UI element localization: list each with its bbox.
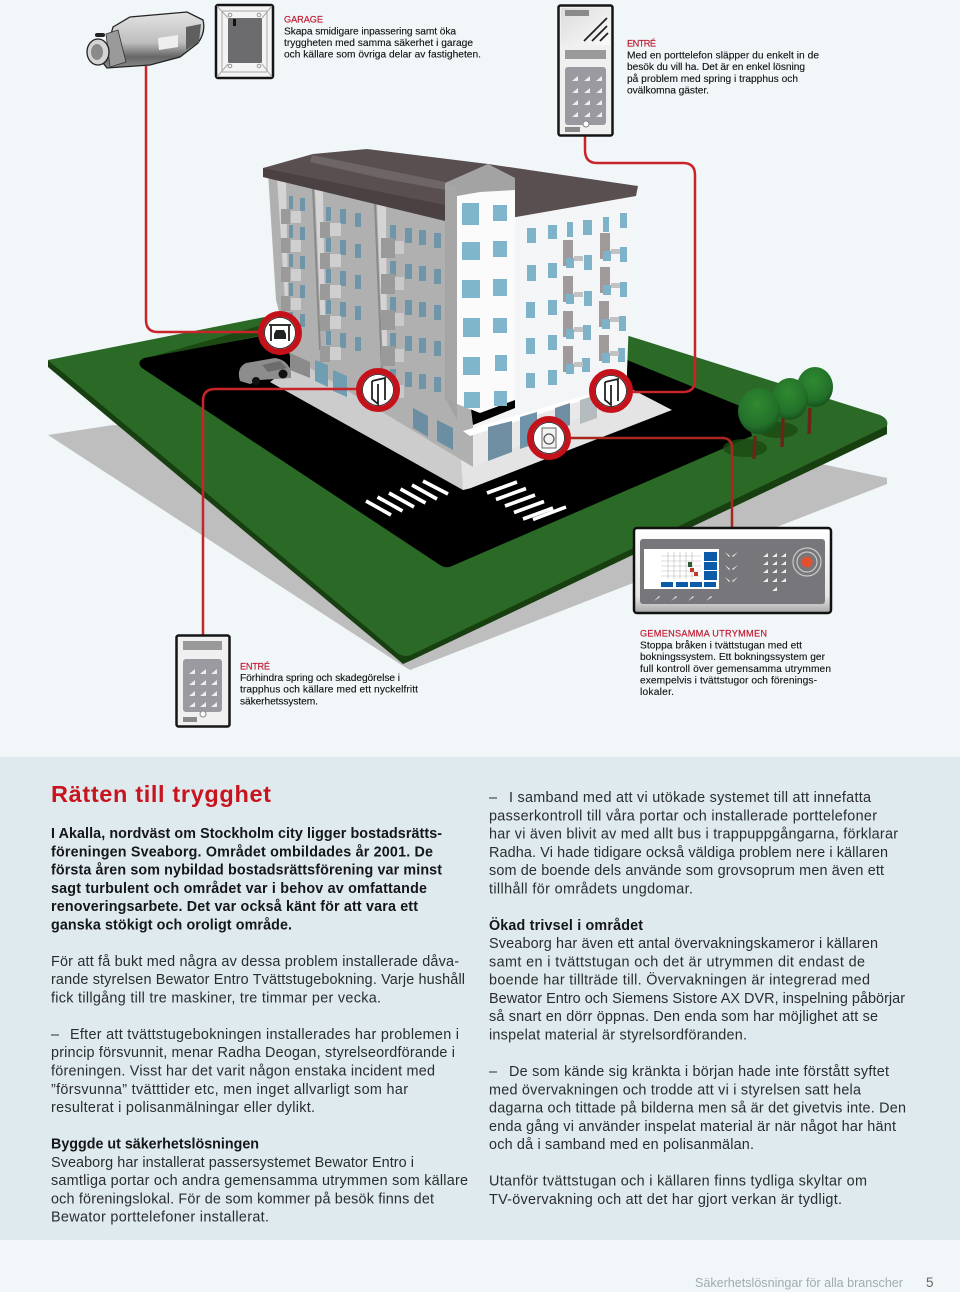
icon: garage reader box — [216, 5, 273, 78]
text block: article right column: inspelat material är styrelsordföranden. — [489, 1028, 747, 1044]
text block: article left column: Sveaborg har installerat passersystemet Bewator Entro i — [51, 1155, 414, 1171]
text block: article right column: Bewator Entro och Siemens Sistore AX DVR, inspelning påbörjar — [489, 991, 905, 1007]
text block: article left column: och föreningslokal. För de som kommer på besök finns det — [51, 1191, 434, 1207]
base windows left — [290, 353, 310, 378]
roof — [263, 149, 638, 220]
text block: entry phone note: ENTRÉ — [627, 39, 656, 49]
text block: entry phone note: ovälkomna gäster. — [627, 86, 709, 96]
text block: keypad note: ENTRÉ — [240, 661, 270, 671]
text block: article left column: första åren som nybildad bostadsrättsförening var minst — [51, 862, 442, 878]
text block: garage note: GARAGE — [284, 15, 323, 25]
icon: entry phone — [558, 6, 612, 136]
text block: article left column: föreningen. Visst har det varit någon enstaka incident med — [51, 1064, 435, 1080]
text block: article right column: TV-övervakning och att det har gjort verkan är tydligt. — [489, 1192, 842, 1208]
trees — [723, 367, 833, 459]
text block: article right column: De som kände sig kränkta i början hade inte förstått syftet — [509, 1064, 889, 1080]
pavement — [270, 360, 672, 490]
footer text: Säkerhetslösningar för alla branscher — [695, 1276, 903, 1290]
illustration: building on green plot with connected devices — [48, 4, 888, 728]
text block: article left column: ganska stökigt och oroligt område. — [51, 917, 292, 933]
text block: article left column: renoveringsarbete. Det var också känt för att vara ett — [51, 899, 418, 915]
text block: shared spaces note: lokaler. — [640, 687, 674, 698]
panel: article background band — [0, 757, 960, 1240]
text block: article right column: passerkontroll till våra portar och installerade porttelefoner — [489, 808, 877, 824]
icon: surveillance camera — [87, 12, 204, 68]
text block: entry phone note: besök du vill ha. Det är en enkel lösning — [627, 62, 805, 73]
text block: article right column: Ökad trivsel i området — [489, 917, 643, 934]
heading: Rätten till trygghet — [51, 781, 271, 807]
text block: keypad note: trapphus och källare med ett nyckelfritt — [240, 685, 418, 696]
text block: article left column: Bewator porttelefoner installerat. — [51, 1210, 269, 1226]
text block: article right column: – — [489, 790, 497, 806]
text block: article right column: Sveaborg har även ett antal övervakningskameror i källaren — [489, 936, 878, 952]
connector: top entry phone to right door — [585, 136, 695, 392]
text block: article left column: I Akalla, nordväst om Stockholm city ligger bostadsrätts- — [51, 826, 442, 842]
icon: washer marker — [530, 419, 568, 457]
car — [239, 358, 291, 385]
icon: door marker left — [359, 371, 397, 409]
text block: article right column: dagarna och tittade på bilderna men så är det givetvis inte. Den — [489, 1101, 906, 1117]
text block: garage note: och källare som övriga delar av fastigheten. — [284, 50, 481, 60]
text block: article right column: boende har tillträde till. Övervakningen är integrerad med — [489, 971, 870, 989]
text block: article left column: För att få bukt med några av dessa problem installerade dåva- — [51, 954, 459, 970]
text block: article left column — [51, 826, 468, 1226]
crosswalks — [366, 481, 566, 520]
text block: shared spaces note: bokningssystem. Ett bokningssystem ger — [640, 652, 826, 663]
building — [263, 149, 638, 467]
text block: article left column: Efter att tvättstugebokningen installerades har problemen i — [70, 1027, 459, 1043]
text block: shared spaces note — [640, 629, 831, 698]
text block: article right column: och då i samband med en polisanmälan. — [489, 1137, 754, 1153]
right facade windows — [526, 213, 627, 388]
text block: article right column: har vi även blivit av med allt bus i trappuppgångarna, förklarar — [489, 826, 898, 842]
text block: article right column: enda gång vi använder inspelat material är när något har hänt — [489, 1119, 896, 1135]
connector: camera and garage to garage marker — [146, 66, 262, 332]
right facade — [473, 188, 634, 467]
green plot — [48, 280, 887, 664]
text block: article left column: samtliga portar och andra gemensamma utrymmen som källare — [51, 1173, 468, 1189]
text block: garage note: tryggheten med samma säkerhet i garage — [284, 38, 473, 49]
text block: keypad note — [240, 661, 418, 707]
text block: article left column: princip försvunnit, menar Radha Deogan, styrelseordförande i — [51, 1045, 455, 1061]
text block: article right column: I samband med att vi utökade systemet till att innefatta — [509, 790, 871, 806]
text block: article right column: tillhåll för områdets ungdomar. — [489, 881, 693, 897]
icon: booking control panel — [634, 528, 831, 613]
text block: shared spaces note: exempelvis i tvättstugor och förenings- — [640, 676, 817, 686]
icon: keypad bottom left — [176, 636, 230, 726]
text block: article right column: Utanför tvättstugan och i källaren finns tydliga skyltar om — [489, 1174, 867, 1190]
connector: left door to keypad — [203, 389, 362, 636]
text block: keypad note: säkerhetssystem. — [240, 696, 318, 707]
text block: article left column: Byggde ut säkerhetslösningen — [51, 1137, 259, 1153]
road — [139, 310, 752, 567]
text block: article right column: – — [489, 1064, 497, 1080]
text block: shared spaces note: Stoppa bråken i tvättstugan med ett — [640, 639, 802, 651]
text block: article right column: med övervakningen och trodde att vi i styrelsen satt hela — [489, 1082, 861, 1098]
text block: article left column: resulterat i polisanmälningar eller dylikt. — [51, 1100, 315, 1116]
tower — [445, 164, 515, 420]
text block: keypad note: Förhindra spring och skadegörelse i — [240, 673, 400, 684]
ground floor right — [473, 396, 590, 467]
icon: garage marker — [261, 314, 299, 352]
text block: garage note — [284, 15, 481, 60]
text block: article left column: rande styrelsen Bewator Entro Tvättstugebokning. Varje hushåll — [51, 972, 465, 988]
text block: article left column: ”försvunna” tvätttider etc, men inget allvarligt som har — [51, 1082, 408, 1098]
text block: article left column: sagt turbulent och området var i behov av omfattande — [51, 881, 427, 897]
ground shadow — [48, 425, 887, 670]
left facade — [268, 172, 473, 467]
text block: entry phone note: på problem med spring i trapphus och — [627, 73, 798, 85]
icon: door marker right — [592, 372, 630, 410]
text block: article right column: som de boende dels använde som grovsoprum men även ett — [489, 863, 884, 879]
text block: shared spaces note: GEMENSAMMA UTRYMMEN — [640, 629, 767, 639]
text block: article left column: fick tillgång till tre maskiner, tre timmar per vecka. — [51, 990, 381, 1006]
text block: shared spaces note: full kontroll över gemensamma utrymmen — [640, 664, 831, 675]
text block: article right column: samt en i tvättstugan och det är utrymmen dit endast de — [489, 954, 865, 970]
connector: washer to booking panel — [566, 438, 732, 528]
text block: article left column: – — [51, 1027, 59, 1043]
text block: entry phone note — [627, 39, 819, 96]
text block: article right column: så snart en dörr öppnas. Den enda som har möjlighet att se — [489, 1009, 878, 1025]
page number: 5 — [926, 1275, 934, 1290]
text block: entry phone note: Med en porttelefon släpper du enkelt in de — [627, 50, 819, 61]
text block: article right column: Radha. Vi hade tidigare också väldiga problem nere i källaren — [489, 845, 888, 861]
tower windows — [462, 203, 507, 408]
text block: article left column: föreningen Sveaborg. Området ombildades år 2001. De — [51, 844, 433, 860]
text block: article right column — [489, 790, 906, 1208]
text block: garage note: Skapa smidigare inpassering samt öka — [284, 26, 456, 37]
